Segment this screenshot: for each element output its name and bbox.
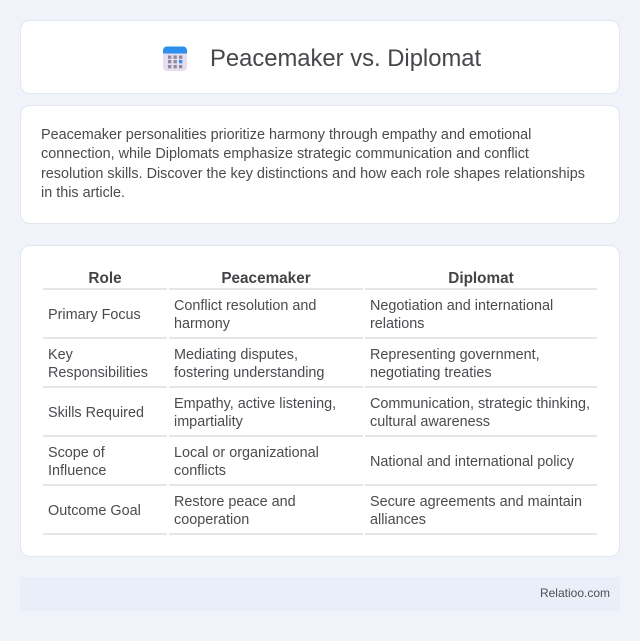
row: Scope of Influence: Local or organizational (174, 445, 319, 461)
row: Primary Focus: Conflict resolution and (174, 298, 316, 314)
row: Primary Focus: Primary Focus (48, 307, 141, 323)
row: Key Responsibilities: fostering understanding (174, 365, 324, 381)
row: Outcome Goal: Secure agreements and maintain (370, 494, 582, 510)
footer bar (20, 577, 620, 611)
intro text: Peacemaker personalities prioritize harmony through empathy and emotional (41, 127, 531, 143)
row: Key Responsibilities: Responsibilities (48, 365, 148, 381)
row: Outcome Goal: Restore peace and (174, 494, 296, 510)
row: Scope of Influence: Influence (48, 463, 106, 479)
row: Primary Focus: harmony (174, 316, 230, 332)
table card (20, 245, 620, 557)
row: Outcome Goal: Outcome Goal (48, 503, 141, 519)
row: Skills Required: Skills Required (48, 405, 144, 421)
header card (20, 20, 620, 94)
intro text: connection, while Diplomats emphasize strategic communication and conflict (41, 146, 529, 162)
intro text (41, 127, 585, 201)
footer text: Relatioo.com (540, 586, 610, 600)
column heading: Role: Role (88, 270, 122, 287)
row: Key Responsibilities: Mediating disputes, (174, 347, 298, 363)
intro card (20, 105, 620, 224)
row: Scope of Influence: conflicts (174, 463, 226, 479)
icon: calendar (163, 46, 187, 71)
column heading: Peacemaker: Peacemaker (221, 270, 311, 287)
row: Outcome Goal: cooperation (174, 512, 249, 528)
row: Key Responsibilities: Key (48, 347, 73, 363)
row: Skills Required: impartiality (174, 414, 243, 430)
row: Scope of Influence: National and international policy (370, 454, 574, 470)
row: Key Responsibilities (48, 347, 540, 381)
row: Key Responsibilities: negotiating treaties (370, 365, 492, 381)
row: Key Responsibilities: Representing government, (370, 347, 540, 363)
column heading: Diplomat: Diplomat (448, 270, 514, 287)
row: Outcome Goal (48, 494, 582, 528)
row: Skills Required: Communication, strategic thinking, (370, 396, 590, 412)
row: Primary Focus: Negotiation and international (370, 298, 553, 314)
row: Skills Required (48, 396, 590, 430)
row: Skills Required: cultural awareness (370, 414, 490, 430)
row: Skills Required: Empathy, active listening, (174, 396, 336, 412)
row: Scope of Influence: Scope of (48, 445, 105, 461)
row: Outcome Goal: alliances (370, 512, 426, 528)
row: Primary Focus (48, 298, 553, 332)
intro text: in this article. (41, 185, 125, 201)
row: Scope of Influence (48, 445, 574, 479)
title: Peacemaker vs. Diplomat (210, 45, 481, 72)
intro text: resolution skills. Discover the key distinctions and how each role shapes relationships (41, 166, 585, 182)
row: Primary Focus: relations (370, 316, 424, 332)
